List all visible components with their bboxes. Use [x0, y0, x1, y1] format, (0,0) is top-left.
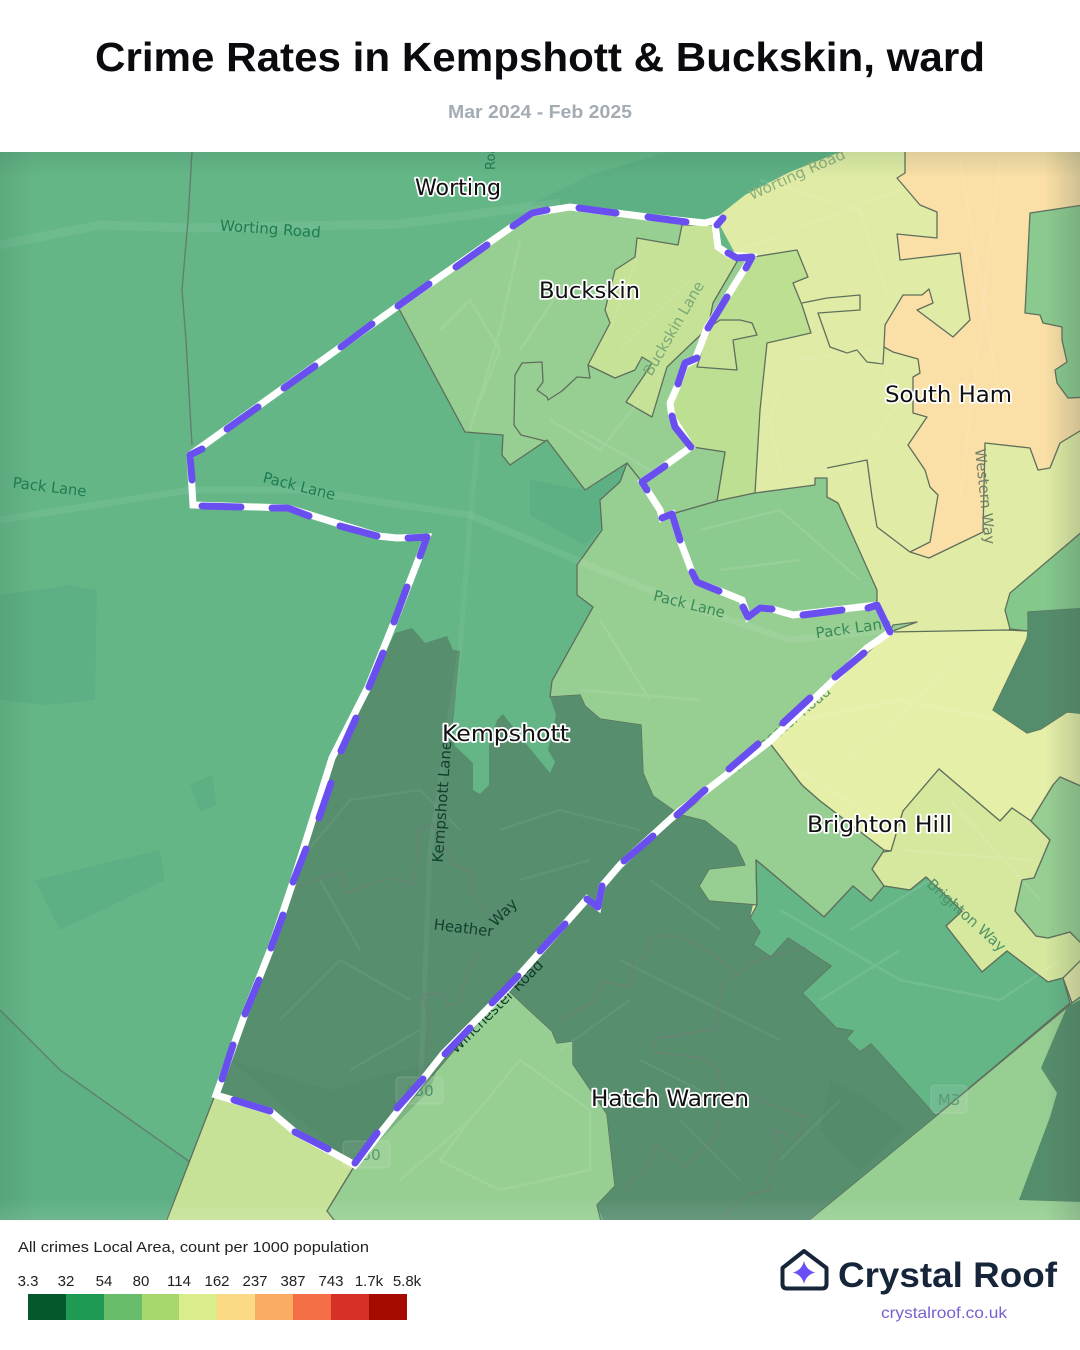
light green area: south of A30 — [327, 989, 615, 1230]
logo: Crystal Roof — [782, 1251, 1057, 1322]
legend values: 54 — [96, 1273, 112, 1290]
road labels: Brighton Way — [923, 875, 1010, 956]
road labels: Pack Lane — [261, 468, 337, 504]
icon: house with star — [782, 1251, 826, 1288]
pale area: Brighton Hill north — [769, 630, 1080, 851]
place labels: Kempshott — [442, 722, 569, 747]
yellow-green pocket: Buckskin Lane — [588, 225, 738, 417]
inner grey boundaries — [0, 152, 807, 1220]
road labels: Winchester Road — [446, 956, 547, 1057]
dark area: Kempshott — [215, 628, 677, 1165]
legend values: 1.7k — [355, 1273, 384, 1290]
legend values: 3.3 — [18, 1273, 38, 1290]
legend colour scale — [28, 1294, 407, 1320]
legend values: 237 — [242, 1273, 268, 1290]
website: crystalroof.co.uk — [881, 1305, 1008, 1322]
legend values: 80 — [133, 1273, 149, 1290]
road labels: Buckskin Lane — [639, 278, 708, 379]
legend values: 114 — [167, 1273, 191, 1290]
light green area: Pack Lane — [550, 463, 890, 813]
road labels: Pack Lane — [12, 474, 87, 500]
legend values: 32 — [58, 1273, 74, 1290]
Buckskin inner cutout — [514, 362, 590, 441]
road shields: A30 — [351, 1146, 381, 1164]
place labels: Brighton Hill — [807, 813, 952, 838]
legend values — [18, 1273, 422, 1290]
road labels: Kempshott Lane — [429, 740, 455, 863]
place labels — [415, 176, 1012, 1112]
road labels: Winchester Road — [727, 682, 834, 776]
dark area: Hatch Warren — [507, 815, 936, 1220]
legend values: 387 — [280, 1273, 306, 1290]
brand name: Crystal Roof — [838, 1256, 1057, 1295]
road labels: Western Way — [971, 448, 999, 545]
legend values: 743 — [318, 1273, 344, 1290]
place labels: South Ham — [885, 383, 1012, 408]
legend values: 5.8k — [393, 1273, 422, 1290]
yellow-green area: south-west — [166, 1098, 352, 1220]
road labels: Heather — [433, 915, 495, 941]
pale boundaries — [802, 295, 1010, 652]
road shields — [343, 1077, 967, 1168]
road shields: M3 — [938, 1091, 960, 1109]
place labels: Hatch Warren — [591, 1087, 749, 1112]
street network — [0, 160, 1060, 1190]
subtitle: date range: Mar 2024 - Feb 2025 — [448, 102, 632, 122]
road labels: Way — [486, 895, 521, 930]
road labels: Worting Road — [219, 217, 321, 242]
light green area: south of Pack Lane — [672, 478, 877, 617]
title: Crime Rates in Kempshott & Buckskin, ward — [95, 34, 985, 80]
pale east area — [670, 152, 1080, 1016]
road labels: Road — [484, 137, 499, 170]
legend — [18, 1239, 422, 1320]
dark area: south-east edge — [1019, 1000, 1080, 1202]
green area: north-east — [1025, 204, 1080, 398]
road labels: Pack Lane — [814, 614, 892, 642]
place labels: Worting — [415, 176, 501, 201]
green and dark areas: east — [1005, 525, 1080, 631]
road labels — [12, 137, 1010, 1057]
light green area: east of Winchester Road — [681, 742, 884, 917]
yellow-green area east of boundary — [670, 250, 811, 501]
legend title: All crimes Local Area, count per 1000 population — [18, 1239, 369, 1256]
green area: Brighton Hill south — [750, 860, 1070, 1116]
ward boundary: Kempshott & Buckskin — [190, 207, 890, 1165]
road shields: A30 — [404, 1082, 434, 1100]
road labels: Worting Road — [746, 145, 848, 204]
legend values: 162 — [204, 1273, 230, 1290]
place labels: Buckskin — [539, 279, 640, 304]
light green area: Buckskin — [398, 207, 752, 490]
yellow-green area: Brighton Hill — [872, 769, 1080, 982]
orange area: South Ham — [884, 140, 1080, 558]
road labels: Pack Lane — [652, 587, 727, 622]
light green area: south-east — [809, 996, 1080, 1220]
